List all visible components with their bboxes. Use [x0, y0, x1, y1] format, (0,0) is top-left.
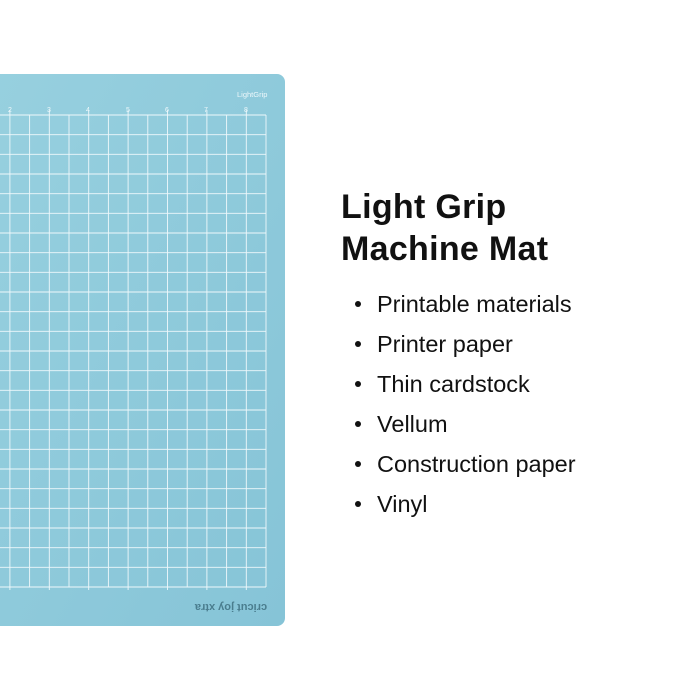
mat image: LightGrip [237, 90, 267, 99]
bullet list: Construction paper [377, 451, 576, 477]
bullet list: Vinyl [377, 491, 428, 517]
mat image: 7 [204, 107, 208, 114]
mat image: 2 [8, 107, 12, 114]
title: Light Grip [341, 188, 506, 226]
mat image: 3 [47, 107, 51, 114]
mat image: cricut joy xtra [194, 601, 267, 613]
mat image: 6 [165, 107, 169, 114]
mat image: 5 [126, 107, 130, 114]
bullet list [355, 291, 576, 517]
mat image: 8 [244, 107, 248, 114]
bullet list: Vellum [377, 411, 448, 437]
title [341, 188, 548, 268]
bullet list: Printer paper [377, 331, 513, 357]
title: Machine Mat [341, 230, 548, 268]
bullet list: Printable materials [377, 291, 572, 317]
mat image: 4 [86, 107, 90, 114]
bullet list: Thin cardstock [377, 371, 530, 397]
